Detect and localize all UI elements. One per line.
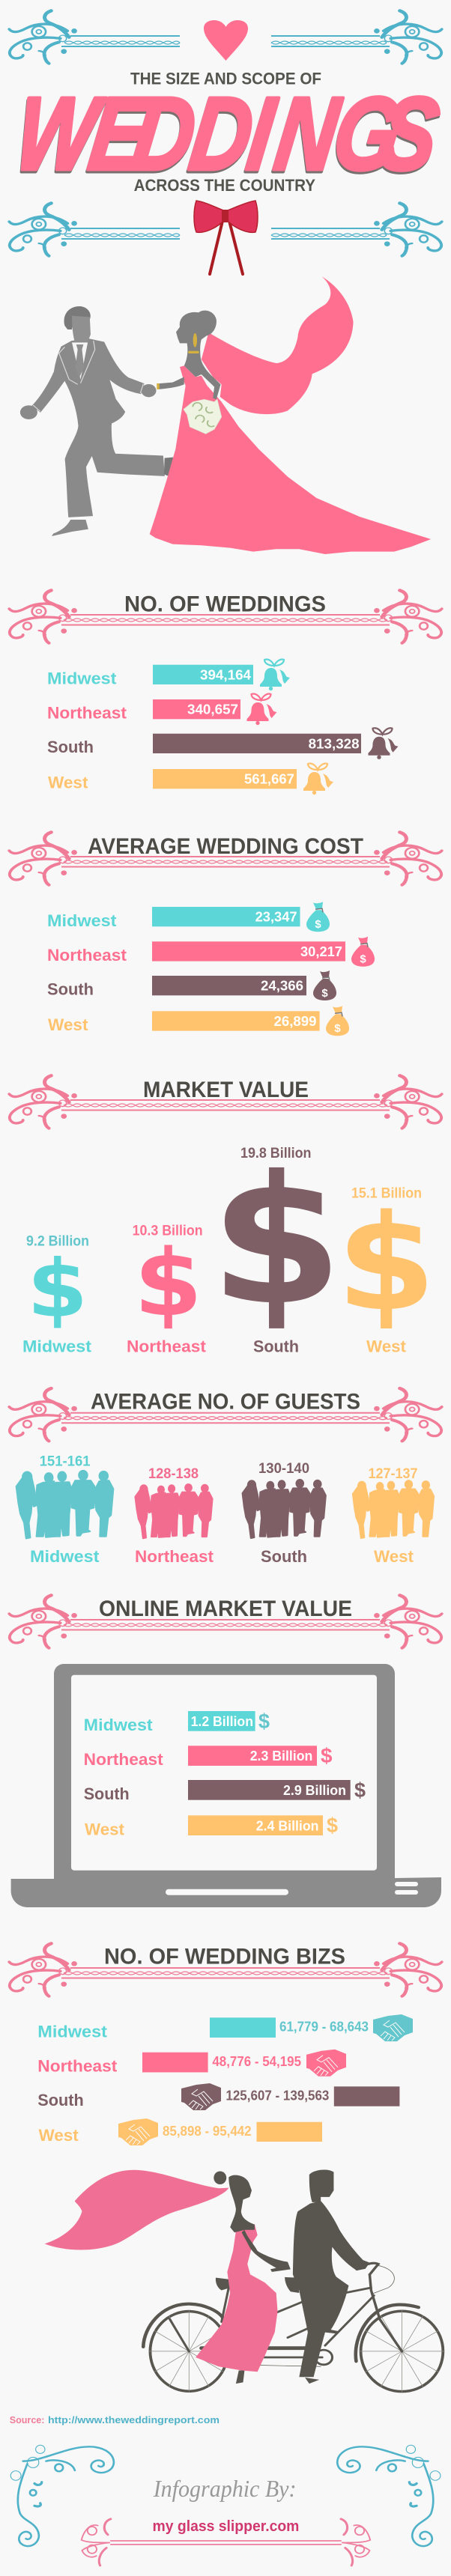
row: Midwest: $ xyxy=(315,918,321,931)
ornament xyxy=(9,1595,442,1648)
column: Northeast: 10.3 Billion xyxy=(133,1223,203,1239)
row: Northeast xyxy=(37,2050,346,2077)
heading: ONLINE MARKET VALUE xyxy=(99,1597,352,1621)
row: South xyxy=(47,728,399,759)
source line: http://www.theweddingreport.com xyxy=(48,2414,220,2425)
row: West: West xyxy=(48,773,88,792)
row: Midwest: Midwest xyxy=(47,911,117,930)
bride veil xyxy=(202,276,354,414)
row: South: South xyxy=(84,1784,130,1803)
row: South: $ xyxy=(321,987,328,1000)
icon: red bow xyxy=(194,201,258,274)
row: Midwest: $ xyxy=(258,1710,270,1733)
bicycle xyxy=(143,2263,444,2393)
column: Midwest xyxy=(22,1233,92,1356)
row: Northeast: $ xyxy=(321,1744,333,1767)
ornament xyxy=(9,832,442,885)
veil xyxy=(45,2170,228,2250)
illustration: couple on tandem bicycle xyxy=(45,2169,444,2393)
group: West: West xyxy=(374,1547,414,1566)
column: South: South xyxy=(253,1337,299,1356)
row: Northeast xyxy=(84,1744,333,1769)
column: South: 19.8 Billion xyxy=(240,1146,312,1161)
column: Northeast: $ xyxy=(134,1230,202,1337)
bride xyxy=(196,2171,291,2384)
column: West: 15.1 Billion xyxy=(351,1185,422,1201)
icon: heart xyxy=(204,20,248,61)
pink ornament xyxy=(82,2519,370,2566)
row: South: South xyxy=(37,2091,84,2109)
heading: AVERAGE WEDDING COST xyxy=(88,834,363,859)
header panel xyxy=(9,10,445,274)
column: Northeast xyxy=(127,1223,207,1356)
row: West: 561,667 xyxy=(244,772,294,787)
row: Midwest xyxy=(84,1710,270,1734)
group: Midwest: 151-161 xyxy=(40,1453,91,1469)
column: West: West xyxy=(366,1337,407,1356)
group: Northeast xyxy=(135,1466,214,1566)
ornament xyxy=(9,1075,442,1128)
column: Midwest: 9.2 Billion xyxy=(26,1233,89,1249)
bouquet xyxy=(184,399,222,434)
heading: NO. OF WEDDING BIZS xyxy=(104,1945,345,1969)
group: West xyxy=(353,1466,434,1566)
group: South: South xyxy=(261,1547,307,1566)
group: Midwest: Midwest xyxy=(30,1547,100,1566)
row: West: West xyxy=(85,1820,125,1838)
title shadow and main word: WEDDINGS xyxy=(9,78,444,194)
heading: MARKET VALUE xyxy=(143,1078,309,1102)
section: average wedding cost xyxy=(9,832,442,1036)
heading: NO. OF WEDDINGS xyxy=(124,592,326,617)
row: Midwest: 1.2 Billion xyxy=(191,1714,253,1729)
row: Northeast: 48,776 - 54,195 xyxy=(212,2054,301,2069)
laptop xyxy=(11,1664,441,1907)
top teal ornament xyxy=(9,10,442,64)
group: South xyxy=(243,1461,326,1566)
heading: AVERAGE NO. OF GUESTS xyxy=(91,1390,360,1415)
credit heading: Infographic By: xyxy=(153,2475,297,2502)
row: South: South xyxy=(47,738,94,756)
row: West xyxy=(39,2118,322,2145)
row: South: 2.9 Billion xyxy=(283,1783,346,1798)
second teal ornament xyxy=(9,203,442,256)
row: Northeast xyxy=(47,937,375,967)
row: Midwest: Midwest xyxy=(47,669,117,687)
row: Northeast: Northeast xyxy=(84,1750,163,1769)
logo text: my glass slipper.com xyxy=(153,2518,299,2535)
group: South: 130-140 xyxy=(258,1461,309,1477)
row: South xyxy=(84,1778,366,1803)
column: West: $ xyxy=(336,1187,436,1340)
row: West xyxy=(48,1006,349,1036)
group: Northeast: Northeast xyxy=(135,1547,214,1566)
ornament xyxy=(9,590,442,643)
teal corner ornaments xyxy=(10,2445,441,2546)
row: South: 125,607 - 139,563 xyxy=(226,2089,329,2103)
row: Northeast: Northeast xyxy=(47,946,127,965)
title line 2: ACROSS THE COUNTRY xyxy=(134,176,315,195)
section: average no. of guests xyxy=(9,1388,442,1566)
row: Northeast: 340,657 xyxy=(187,702,238,717)
footer xyxy=(10,2445,441,2566)
row: South: $ xyxy=(354,1778,366,1802)
row: Midwest: 61,779 - 68,643 xyxy=(279,2019,369,2034)
row: Northeast xyxy=(47,694,277,725)
row: Northeast: 30,217 xyxy=(300,944,342,959)
row: West xyxy=(48,764,333,795)
row: South: 813,328 xyxy=(309,736,360,751)
section: no. of weddings xyxy=(9,590,442,795)
row: Northeast: 2.3 Billion xyxy=(250,1749,312,1764)
row: Midwest: 23,347 xyxy=(255,910,297,925)
row: Northeast: Northeast xyxy=(47,703,127,722)
row: Midwest xyxy=(37,2014,413,2041)
source line: Source: xyxy=(10,2414,44,2425)
row: South xyxy=(47,970,336,1000)
section: online market value xyxy=(9,1595,442,1907)
row: West: West xyxy=(48,1015,88,1034)
row: Midwest: 394,164 xyxy=(200,667,251,682)
ornament xyxy=(9,1388,442,1441)
ornament xyxy=(9,1943,442,1996)
row: West xyxy=(85,1814,338,1838)
illustration: bride and groom xyxy=(20,276,431,554)
jewellery xyxy=(157,333,199,389)
row: Northeast: $ xyxy=(360,953,366,966)
row: South: South xyxy=(47,980,94,999)
column: Midwest: $ xyxy=(27,1244,88,1335)
row: Midwest xyxy=(47,660,290,690)
row: Midwest xyxy=(47,902,330,932)
bride dress xyxy=(150,365,431,554)
row: West: 85,898 - 95,442 xyxy=(163,2124,252,2139)
column: Northeast: Northeast xyxy=(127,1337,207,1356)
group: Northeast: 128-138 xyxy=(148,1466,199,1482)
column: Midwest: Midwest xyxy=(22,1337,92,1356)
group: West: 127-137 xyxy=(369,1466,418,1482)
group: Midwest xyxy=(16,1453,113,1566)
title shadow and main word: WEDDINGS xyxy=(10,76,445,192)
row: Midwest: Midwest xyxy=(37,2022,108,2041)
row: West: $ xyxy=(334,1022,341,1035)
section: market value xyxy=(9,1075,442,1356)
groom xyxy=(20,306,173,536)
section: no. of wedding bizs xyxy=(9,1943,442,2145)
saddles xyxy=(216,2277,299,2293)
row: South: 24,366 xyxy=(261,979,303,994)
row: West: $ xyxy=(327,1814,338,1837)
groom xyxy=(293,2169,369,2384)
row: West: West xyxy=(39,2126,79,2145)
row: South xyxy=(37,2083,399,2110)
row: West: 26,899 xyxy=(274,1014,316,1029)
title line 1: THE SIZE AND SCOPE OF xyxy=(130,70,321,88)
bride body xyxy=(157,311,221,399)
column: South: $ xyxy=(210,1138,343,1345)
row: West: 2.4 Billion xyxy=(256,1818,319,1833)
row: Northeast: Northeast xyxy=(37,2056,118,2075)
row: Midwest: Midwest xyxy=(84,1716,153,1734)
